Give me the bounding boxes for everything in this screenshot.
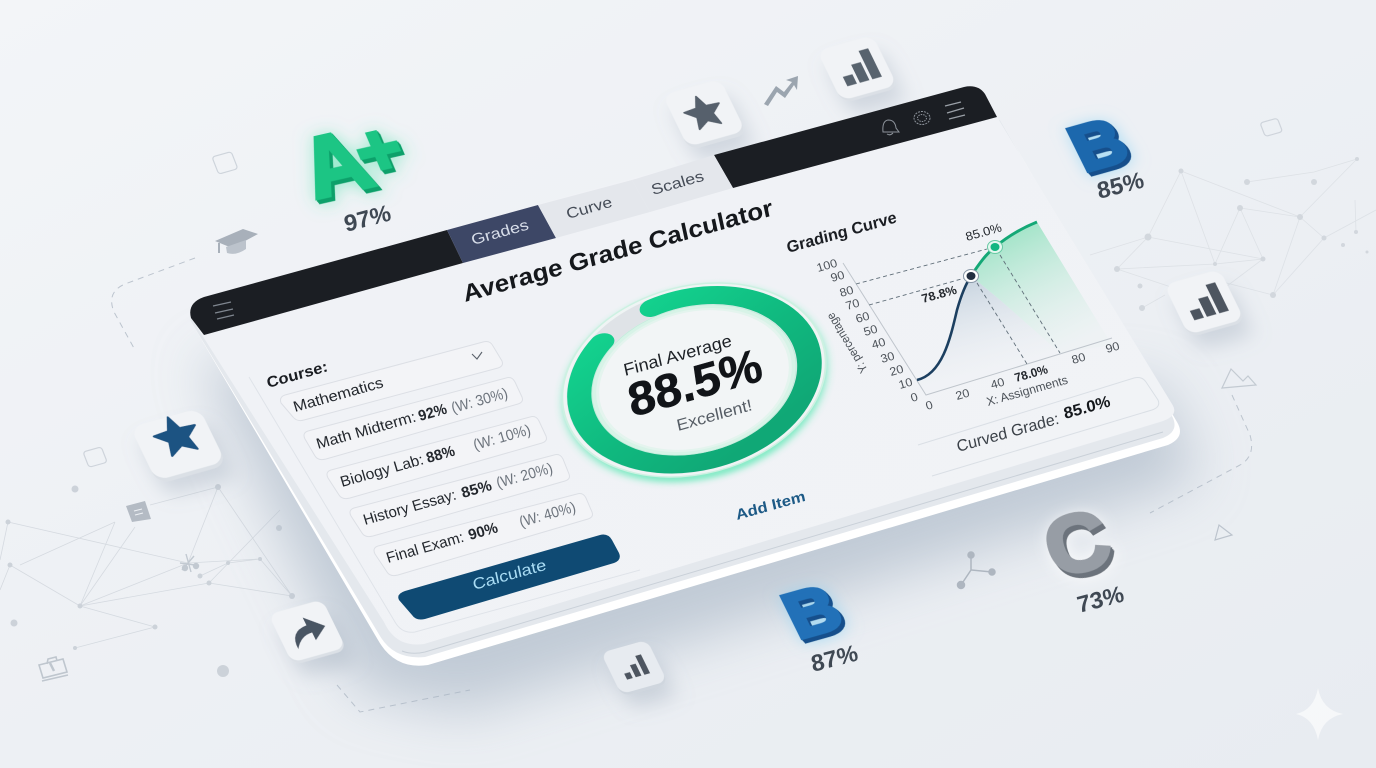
chart axes (843, 263, 1112, 395)
y axis title: Y: percentage (823, 310, 871, 376)
row: history essay: 85% (459, 477, 494, 502)
grading curve chart (815, 221, 1121, 413)
dashed frame lines (112, 258, 1252, 712)
point 78.8 (964, 270, 978, 282)
curve segment navy (917, 276, 971, 380)
card icon: blue star (130, 408, 227, 484)
row: final exam: (W: 40%) (517, 499, 578, 531)
row: final exam (374, 494, 592, 576)
y axis labels (815, 256, 920, 405)
tab: Curve (538, 180, 650, 238)
icon: right menu (945, 102, 965, 119)
gauge status: Excellent! (675, 396, 754, 435)
button: calculate: Calculate (471, 556, 548, 594)
row: biology lab: Biology Lab: (338, 452, 426, 491)
y axis labels: 100 (815, 256, 839, 275)
row: math midterm (304, 378, 522, 460)
left top bar (190, 230, 463, 335)
x axis labels: 20 (954, 386, 971, 403)
icon: tray (39, 657, 68, 681)
button: calculate (398, 535, 620, 620)
x axis labels: 0 (924, 398, 935, 413)
grade badge: C: C (1033, 491, 1121, 595)
tab: Scales: Scales (649, 168, 706, 199)
card icon: bars right (1164, 269, 1245, 337)
row: history essay: History Essay: (361, 487, 458, 529)
icon: trend arrow (764, 76, 798, 106)
curved grade box (918, 378, 1159, 476)
y axis labels: 0 (909, 390, 920, 405)
card icon: bars top (817, 35, 898, 103)
icon: graduation cap (215, 229, 258, 254)
grade badge: B lower: B (772, 572, 853, 652)
curve segment green (971, 222, 1037, 276)
main calculator panel (189, 86, 1180, 666)
icon: settings (914, 112, 930, 124)
row: biology lab: (W: 10%) (471, 422, 533, 454)
chart heading: Grading Curve (785, 208, 898, 257)
icon: left menu (213, 302, 234, 319)
icon: bell (883, 120, 899, 135)
input: course dropdown: Mathematics (291, 375, 386, 416)
y axis labels: 50 (862, 322, 879, 339)
y axis labels: 70 (844, 296, 861, 313)
y axis labels: 10 (897, 375, 914, 392)
sparkle (1296, 688, 1343, 740)
row: math midterm: (W: 30%) (449, 385, 510, 417)
grade badge: A+ (284, 104, 421, 237)
gauge value: 88.5% (623, 339, 767, 428)
y axis labels: 20 (888, 362, 905, 379)
y axis labels: 80 (838, 283, 855, 300)
input: course dropdown (280, 342, 502, 421)
title: Average Grade Calculator (461, 195, 776, 308)
row: history essay (350, 454, 570, 537)
x axis labels: 78.0% (1013, 363, 1049, 385)
icon: branch nodes (958, 552, 995, 588)
row: history essay: (W: 20%) (494, 460, 555, 492)
card icon: arrow (268, 599, 347, 665)
gauge label: Final Average (622, 330, 733, 380)
background network left (0, 484, 295, 677)
value label 85: 85.0% (964, 221, 1003, 244)
row: math midterm: 92% (416, 401, 449, 425)
y axis labels: 40 (870, 335, 887, 352)
gauge track (540, 255, 848, 505)
grade A+ percent: 97% (342, 200, 393, 237)
tab: Grades (447, 205, 556, 263)
row: biology lab (327, 416, 546, 499)
curved grade box: 85.0% (1062, 392, 1112, 423)
tab: Curve: Curve (564, 194, 614, 223)
icon: asterisk nodes (180, 554, 198, 572)
grade badge: B upper right: B (1058, 105, 1139, 185)
y axis labels: 90 (829, 268, 846, 285)
gauge progress arc (560, 270, 829, 489)
icon: book (126, 501, 151, 522)
icon: square outline right (1260, 118, 1283, 136)
icon: square outline left (83, 447, 107, 467)
gauge glow (548, 263, 842, 505)
icon: triangle outline (1215, 525, 1232, 540)
y axis labels: 60 (854, 309, 871, 326)
row: final exam: Final Exam: (384, 529, 466, 567)
curved grade box: Curved Grade: (955, 409, 1061, 456)
right top bar (714, 86, 997, 188)
icon: square outline top left (212, 152, 238, 174)
icon: mountain outline (1222, 369, 1256, 388)
grade B percent 87: 87% (809, 640, 860, 677)
row: math midterm: Math Midterm: (314, 409, 418, 453)
left input card outline (249, 377, 640, 632)
value label 78.8: 78.8% (920, 283, 958, 306)
chart guide lines (856, 249, 1060, 364)
course label: Course: (265, 359, 329, 392)
panel rim (190, 120, 1180, 666)
grade badge: A+: A (284, 112, 385, 216)
point 85.0 (988, 240, 1002, 254)
row: biology lab: 88% (424, 443, 457, 467)
grade B percent 85: 85% (1095, 167, 1146, 204)
background network right (1090, 157, 1376, 311)
add item link: Add Item (734, 488, 807, 524)
chart area fills (971, 222, 1112, 353)
card icon: bars bottom (601, 640, 668, 697)
x axis labels (924, 339, 1121, 413)
panel face (189, 86, 1174, 645)
grade C percent: 73% (1075, 581, 1126, 618)
panel shadow (200, 360, 1200, 712)
x axis labels: 40 (989, 375, 1006, 392)
card icon: star top (663, 79, 747, 150)
x axis labels: 80 (1070, 350, 1087, 367)
x axis title: X: Assignments (985, 373, 1069, 409)
y axis labels: 30 (879, 349, 896, 366)
grade badge: A+: + (341, 107, 416, 193)
x axis labels: 90 (1104, 339, 1121, 356)
final average gauge (540, 255, 848, 505)
tab: Grades: Grades (469, 217, 531, 249)
tab: Scales (632, 155, 733, 212)
row: final exam: 90% (466, 520, 500, 544)
